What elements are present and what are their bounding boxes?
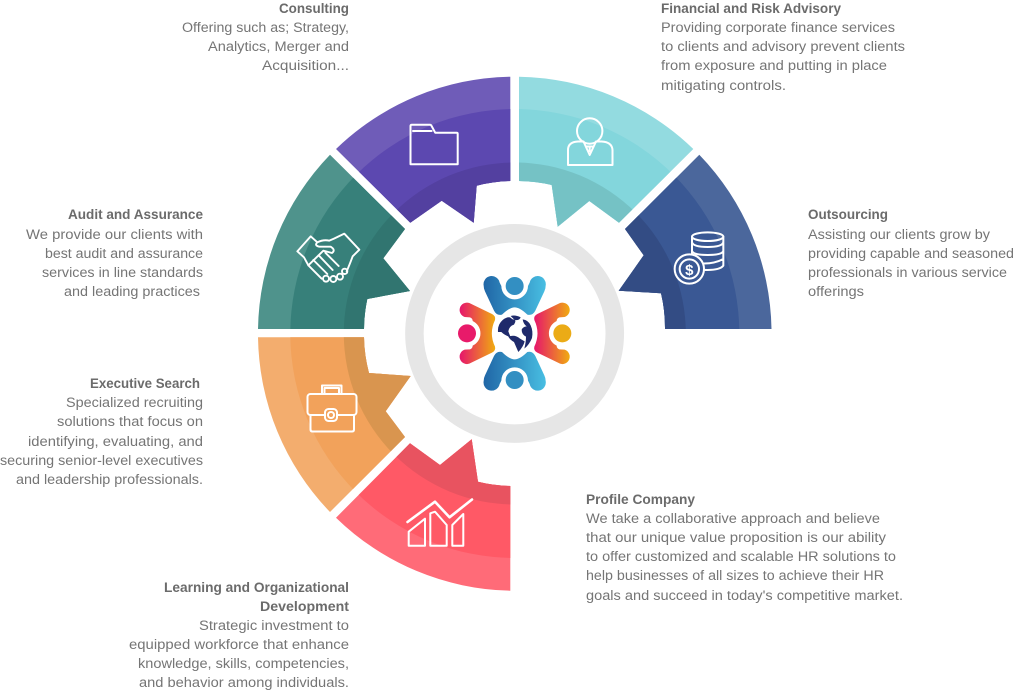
- text: consulting: Acquisition...: [262, 58, 349, 73]
- text: learning and organizational development: equipped workforce that enhance: [129, 637, 349, 652]
- text: audit and assurance: services in line standards: [42, 265, 203, 280]
- text: audit and assurance: We provide our clients with: [26, 227, 203, 242]
- text: profile company: goals and succeed in today's competitive market.: [586, 588, 903, 603]
- segment: learning and organizational development: [336, 439, 510, 591]
- text: executive search: Executive Search: [90, 376, 200, 391]
- text: financial and risk advisory: Financial and Risk Advisory: [661, 1, 841, 16]
- text: audit and assurance: and leading practices: [64, 284, 200, 299]
- icon: briefcase: [308, 386, 356, 432]
- segment: consulting: [336, 76, 510, 223]
- text: financial and risk advisory: to clients and advisory prevent clients: [661, 39, 905, 54]
- icon: handshake: [297, 234, 359, 282]
- text: financial and risk advisory: mitigating controls.: [661, 78, 786, 93]
- text: financial and risk advisory: Providing corporate finance services: [661, 20, 895, 35]
- text: profile company: [586, 492, 903, 603]
- text: consulting: Analytics, Merger and: [208, 39, 349, 54]
- text: profile company: Profile Company: [586, 492, 695, 507]
- text: profile company: to offer customized and scalable HR solutions to: [586, 549, 896, 564]
- icon: folder: [410, 125, 458, 164]
- text: learning and organizational development: Learning and Organizational: [164, 580, 349, 595]
- text: profile company: that our unique value proposition is our ability: [586, 530, 886, 545]
- icon: person: [568, 118, 612, 165]
- segment: executive search: [258, 337, 411, 512]
- text: learning and organizational development: knowledge, skills, competencies,: [138, 656, 349, 671]
- text: executive search: and leadership professionals.: [16, 472, 203, 487]
- text: financial and risk advisory: [661, 1, 905, 93]
- text: audit and assurance: [26, 207, 203, 299]
- segment: audit and assurance: [258, 154, 410, 329]
- center logo: [458, 276, 571, 391]
- text: audit and assurance: Audit and Assurance: [68, 207, 203, 222]
- text: outsourcing: Outsourcing: [808, 207, 888, 222]
- text: learning and organizational development: [129, 580, 350, 690]
- segment: financial and risk advisory: [519, 76, 694, 227]
- text: financial and risk advisory: from exposure and putting in place: [661, 58, 887, 73]
- text: consulting: [182, 1, 349, 73]
- text: executive search: [0, 376, 203, 487]
- text: outsourcing: offerings: [808, 284, 864, 299]
- text: executive search: solutions that focus on: [57, 414, 203, 429]
- text: outsourcing: Assisting our clients grow by: [808, 227, 990, 242]
- center ring: [414, 233, 615, 434]
- text: executive search: securing senior-level executives: [0, 453, 203, 468]
- icon: globe: [498, 316, 532, 352]
- icon: chart with arrow: [408, 500, 472, 546]
- text: learning and organizational development: Development: [260, 599, 350, 614]
- text: outsourcing: providing capable and seasoned: [808, 246, 1014, 261]
- text: outsourcing: [808, 207, 1014, 299]
- text: consulting: Offering such as; Strategy,: [182, 20, 349, 35]
- icon: dollar sign: $: [685, 262, 694, 279]
- text: profile company: We take a collaborative approach and believe: [586, 511, 880, 526]
- text: learning and organizational development: Strategic investment to: [199, 618, 349, 633]
- text: consulting: Consulting: [279, 1, 349, 16]
- text: audit and assurance: best audit and assurance: [45, 246, 203, 261]
- text: executive search: identifying, evaluating, and: [28, 434, 203, 449]
- text: outsourcing: professionals in various service: [808, 265, 1007, 280]
- segment: outsourcing: [618, 154, 772, 329]
- icon: coins and database: [675, 232, 723, 284]
- text: executive search: Specialized recruiting: [66, 395, 203, 410]
- text: learning and organizational development: and behavior among individuals.: [139, 675, 349, 690]
- text: profile company: help businesses of all sizes to achieve their HR: [586, 568, 884, 583]
